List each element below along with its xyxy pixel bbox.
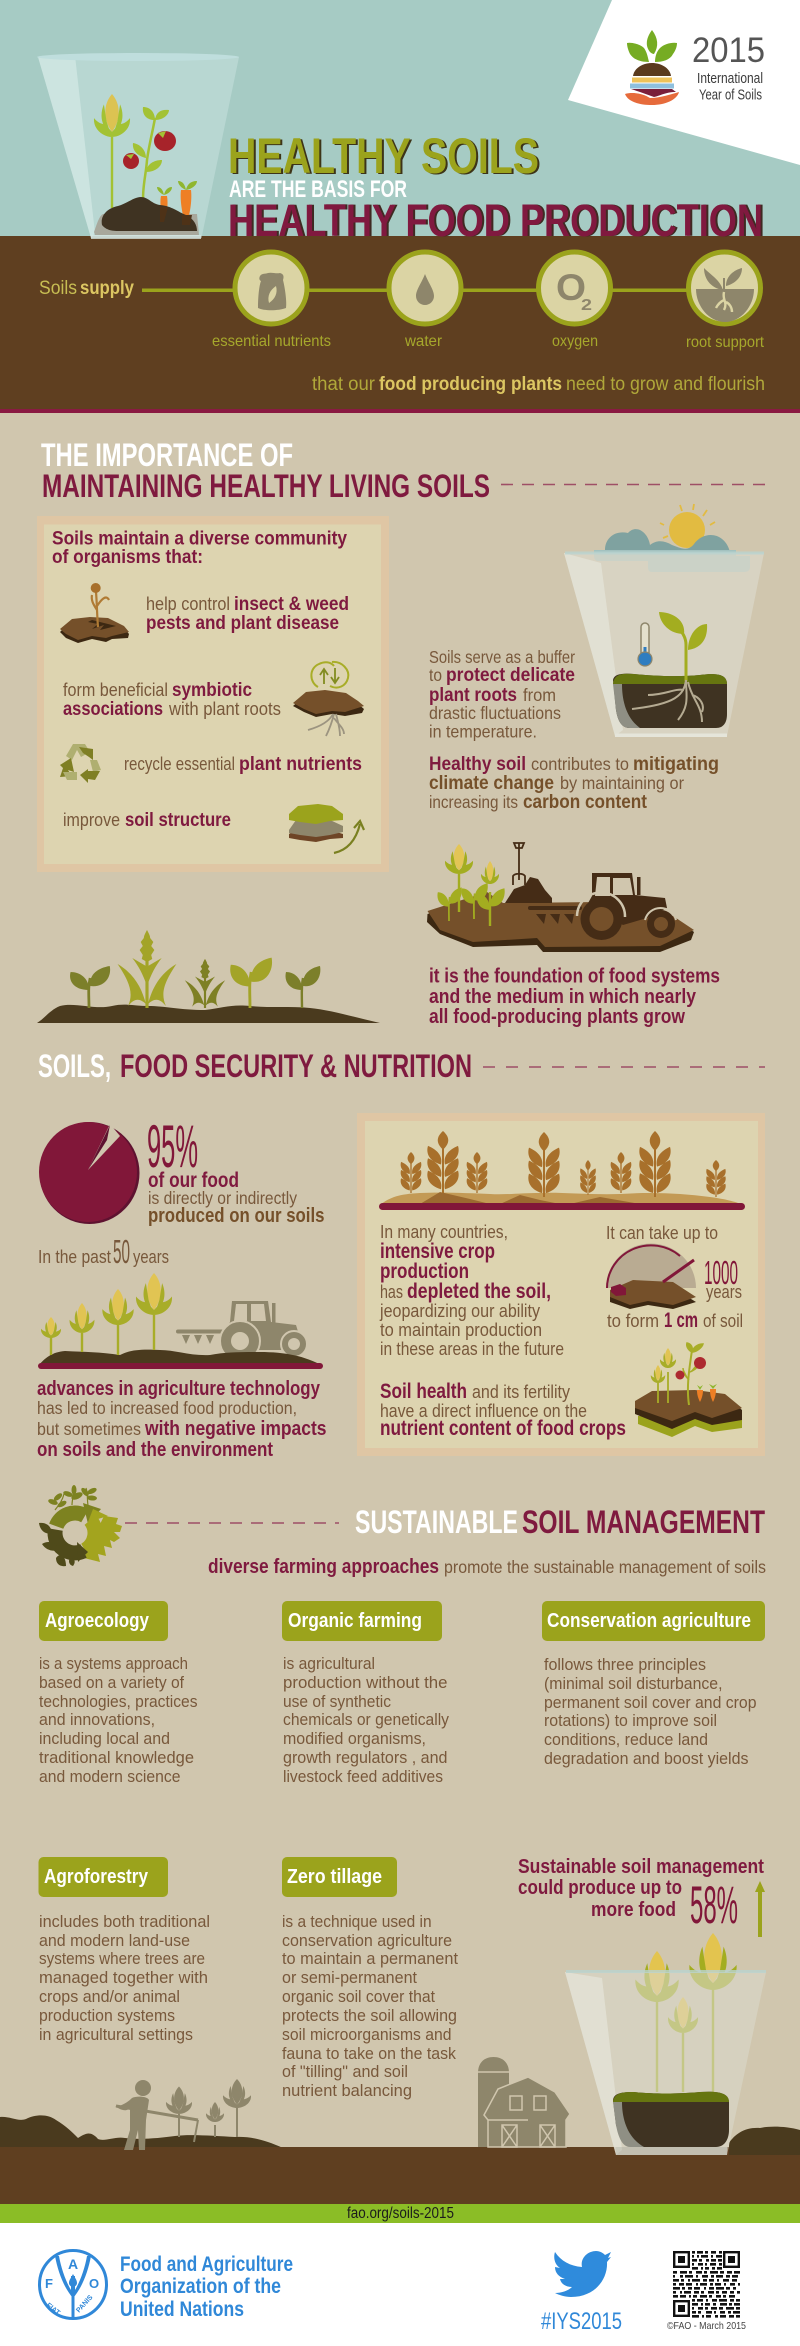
soil pile and spade <box>505 877 552 903</box>
illustration: wheat field <box>379 1131 745 1210</box>
right mound <box>729 2127 800 2155</box>
icon: FAO emblem: PANIS <box>75 2294 95 2314</box>
text: advances in agriculture technology: but sometimes <box>37 1419 141 1439</box>
card: Conservation agriculture <box>542 1601 765 1768</box>
card: Zero tillage <box>282 1857 458 2100</box>
description: modified organisms, <box>283 1729 426 1748</box>
stat: 95 percent of our food: 95% <box>147 1113 198 1180</box>
text: buffer against temperature: drastic fluctuations <box>429 703 561 723</box>
QR code <box>673 2252 740 2316</box>
heading: soils, food security and nutrition: SOILS, <box>38 1048 111 1084</box>
logo caption: International <box>697 71 763 87</box>
text: to form 1 cm of soil: to form <box>607 1311 659 1331</box>
text: buffer against temperature: from <box>523 685 556 705</box>
text: climate change mitigation: Healthy soil <box>429 753 526 775</box>
glass with sun, cloud, thermometer and plant <box>564 504 764 737</box>
item: symbiotic associations <box>63 679 281 720</box>
intro: diverse farming approaches: diverse farming approaches <box>208 1556 439 1578</box>
stat: 95 percent of our food <box>147 1113 324 1227</box>
text: buffer against temperature: to <box>429 665 442 685</box>
item: pest control: insect & weed <box>234 593 349 615</box>
item: soil structure: improve <box>63 810 120 830</box>
description: and modern science <box>39 1767 180 1786</box>
soil <box>613 2092 729 2147</box>
description: production without the <box>283 1673 448 1692</box>
description: crops and/or animal <box>39 1987 180 2006</box>
illustration: seedlings row <box>37 930 380 1023</box>
text: advances in agriculture technology: has led to increased food production, <box>37 1398 297 1418</box>
text: soil depletion: production <box>380 1260 469 1283</box>
text: soil depletion: in these areas in the future <box>380 1339 564 1359</box>
logo caption: Year of Soils <box>699 88 762 104</box>
card: Organic farming <box>282 1601 449 1786</box>
bottom soil band <box>0 2115 800 2204</box>
illustration: soil slab with crops, spade and tractor <box>427 843 694 952</box>
icon: oxygen <box>538 252 610 324</box>
text: soil depletion: jeopardizing our ability <box>379 1301 540 1321</box>
text: climate change mitigation: mitigating <box>633 753 719 775</box>
description: managed together with <box>39 1968 208 1987</box>
item: recycle nutrients: recycle essential <box>124 754 235 774</box>
text: climate change mitigation: contributes to <box>531 754 629 774</box>
icon captions: oxygen <box>552 333 598 350</box>
plant 4 <box>230 958 272 1008</box>
card: Agroforestry: Agroforestry <box>44 1866 149 1888</box>
card: Agroforestry <box>38 1857 210 2044</box>
item: symbiotic associations: with plant roots <box>168 699 281 719</box>
soil mound <box>37 1005 380 1023</box>
description <box>39 1654 198 1786</box>
top sprigs <box>47 1485 98 1510</box>
description: chemicals or genetically <box>283 1710 449 1729</box>
description: production systems <box>39 2006 175 2025</box>
description: protects the soil allowing <box>282 2006 457 2025</box>
closing sentence: that our <box>312 374 376 395</box>
illustration: nutrient-rich layered soil with crops <box>635 1343 742 1437</box>
closing sentence <box>312 374 765 395</box>
description: is agricultural <box>283 1654 375 1673</box>
stat: 95 percent of our food: produced on our soils <box>148 1205 324 1227</box>
icon: FAO emblem: F <box>45 2276 53 2291</box>
text: foundation of food systems: it is the foundation of food systems <box>429 966 720 988</box>
text: soil health: Soil health <box>380 1380 467 1403</box>
description: degradation and boost yields <box>544 1749 748 1768</box>
item: pest control: help control <box>146 594 230 614</box>
description: technologies, practices <box>39 1692 198 1711</box>
lead label: supply <box>80 278 134 299</box>
heading: importance of soils: MAINTAINING HEALTHY LIVING SOILS <box>42 468 490 504</box>
text: climate change mitigation <box>429 753 719 813</box>
heading: importance of soils: THE IMPORTANCE OF <box>41 437 293 473</box>
description: includes both traditional <box>39 1912 210 1931</box>
sky <box>0 0 800 236</box>
closing sentence: need to grow and flourish <box>566 374 765 395</box>
tomato plant <box>123 107 176 213</box>
plough <box>528 906 582 924</box>
description: based on a variety of <box>39 1673 184 1692</box>
thermometer <box>638 623 652 666</box>
item: recycle nutrients <box>124 753 362 775</box>
icon: FAO emblem: O <box>89 2276 99 2291</box>
icon: root support <box>688 252 760 324</box>
glass with tall corn plants <box>565 1933 766 2155</box>
icon: oxygen: 2 <box>581 297 592 314</box>
heading: soils, food security and nutrition: FOOD SECURITY & NUTRITION <box>120 1048 472 1084</box>
plant 5 <box>286 966 320 1008</box>
logo panel: International Year of Soils <box>568 0 800 165</box>
left mound <box>0 2115 283 2148</box>
maroon bar <box>38 1363 323 1369</box>
year: 2015 <box>692 31 765 70</box>
lead label: Soils <box>39 278 77 299</box>
heading: sustainable soil management: SUSTAINABLE <box>355 1504 518 1540</box>
stat: 1000 years: years <box>706 1282 742 1302</box>
card: Conservation agriculture: Conservation agriculture <box>547 1610 751 1632</box>
description: (minimal soil disturbance, <box>544 1674 722 1693</box>
text: advances in agriculture technology <box>37 1377 326 1461</box>
description: systems where trees are <box>39 1949 205 1968</box>
description: nutrient balancing <box>282 2081 412 2100</box>
intro: diverse farming approaches <box>208 1556 766 1578</box>
icon captions <box>212 333 764 351</box>
header banner <box>0 0 800 413</box>
text: advances in agriculture technology: advances in agriculture technology <box>37 1377 320 1400</box>
icon: water drop <box>389 252 461 324</box>
corn <box>179 2108 237 2137</box>
arrow <box>755 1881 765 1937</box>
lime arrow <box>84 1509 122 1562</box>
glass <box>564 553 764 736</box>
item: pest control: pests and plant disease <box>146 612 339 634</box>
soil <box>613 674 727 728</box>
text: buffer against temperature: plant roots <box>429 684 517 706</box>
soil band <box>0 236 800 410</box>
description: traditional knowledge <box>39 1748 194 1767</box>
text: it can take up to: It can take up to <box>606 1223 718 1243</box>
stat: 1000 years: 1000 <box>704 1254 738 1291</box>
stat: 95 percent of our food: is directly or indirectly <box>148 1188 297 1208</box>
text: buffer against temperature <box>429 647 575 742</box>
icon: oxygen: O <box>556 267 586 308</box>
text: foundation of food systems: and the medium in which nearly <box>429 986 697 1008</box>
soil <box>102 197 197 231</box>
icon: sustainable cycle with plants <box>39 1485 122 1566</box>
icon: cycle, soil and roots <box>293 662 364 736</box>
text: to form 1 cm of soil <box>607 1309 743 1332</box>
text: to form 1 cm of soil: 1 cm <box>664 1309 698 1332</box>
card: Agroecology <box>39 1601 198 1786</box>
text: advances in agriculture technology: on soils and the environment <box>37 1438 273 1461</box>
item: soil structure: soil structure <box>125 809 231 831</box>
title: HEALTHY SOILS <box>228 128 539 184</box>
description: or semi-permanent <box>282 1968 417 1987</box>
closing sentence: food producing plants <box>379 374 562 395</box>
description <box>283 1654 449 1786</box>
icon captions: water <box>404 333 443 350</box>
farmer <box>115 2080 198 2150</box>
text: in the past 50 years: 50 <box>113 1233 130 1270</box>
text: climate change mitigation: climate change <box>429 772 554 794</box>
description: and modern land-use <box>39 1931 190 1950</box>
text: soil depletion: In many countries, <box>380 1222 508 1242</box>
text: foundation of food systems: all food-producing plants grow <box>429 1006 685 1028</box>
maroon strip <box>0 409 800 413</box>
icon: essential nutrients sack <box>235 252 307 324</box>
description <box>544 1655 756 1768</box>
description: organic soil cover that <box>282 1987 435 2006</box>
callout: could produce up to 58% more food: 58% <box>690 1876 738 1935</box>
sun <box>660 504 715 548</box>
item: pest control <box>146 593 349 634</box>
description: in agricultural settings <box>39 2025 193 2044</box>
icon captions: root support <box>686 334 764 351</box>
description: soil microorganisms and <box>282 2025 452 2044</box>
icon: layered soil with arrow <box>289 804 364 853</box>
text: in the past 50 years: In the past <box>38 1247 111 1267</box>
dark arrow <box>39 1523 88 1566</box>
plant <box>674 624 686 681</box>
card: Zero tillage: Zero tillage <box>287 1866 382 1888</box>
icon: FAO emblem: FIAT <box>45 2302 61 2317</box>
roots <box>632 680 703 722</box>
text: buffer against temperature: in temperature. <box>429 722 537 742</box>
item: recycle nutrients: plant nutrients <box>239 753 362 775</box>
description: is a technique used in <box>282 1912 432 1931</box>
text: soil depletion: intensive crop <box>380 1240 495 1263</box>
description: growth regulators , and <box>283 1748 448 1767</box>
url bar <box>0 2204 800 2223</box>
icon: IYS logo <box>625 30 679 105</box>
plant 1 <box>70 966 110 1008</box>
text: foundation of food systems <box>429 966 720 1028</box>
copyright: ©FAO - March 2015 <box>667 2320 746 2332</box>
description: and innovations, <box>39 1710 155 1729</box>
description: rotations) to improve soil <box>544 1711 717 1730</box>
description <box>39 1912 210 2044</box>
carrots <box>157 181 197 225</box>
icon: cracked soil with plant <box>60 583 129 643</box>
text: climate change mitigation: by maintaining or <box>560 773 684 793</box>
description <box>282 1912 458 2100</box>
icon: FAO emblem: A <box>68 2256 78 2272</box>
chart: 95% pie <box>39 1122 140 1224</box>
text: advances in agriculture technology: with negative impacts <box>144 1417 326 1440</box>
callout: could produce up to 58% more food: more food <box>591 1898 676 1921</box>
soil <box>38 1350 323 1366</box>
url bar: fao.org/soils-2015 <box>347 2205 454 2222</box>
text: soil health: nutrient content of food crops <box>380 1417 626 1440</box>
panel: intensive crop production <box>357 1113 765 1456</box>
item: symbiotic associations: symbiotic <box>172 679 252 701</box>
gauge: 1000 years <box>606 1244 696 1309</box>
FAO name: Food and Agriculture <box>120 2252 293 2276</box>
corn <box>635 1933 737 2092</box>
description: use of synthetic <box>283 1692 391 1711</box>
clouds <box>605 529 730 552</box>
callout: could produce up to 58% more food: Sustainable soil management <box>518 1855 764 1878</box>
plant 2 tall millet <box>118 930 176 1008</box>
panel heading <box>52 528 347 568</box>
panel heading: Soils maintain a diverse community <box>52 528 347 550</box>
icon captions: essential nutrients <box>212 333 331 350</box>
heading: sustainable soil management <box>355 1504 765 1540</box>
grey base <box>94 214 199 235</box>
description: of "tilling" and soil <box>282 2062 408 2081</box>
card: Organic farming: Organic farming <box>288 1610 422 1632</box>
text: in the past 50 years: years <box>133 1247 169 1267</box>
text: climate change mitigation: carbon content <box>523 791 647 813</box>
stat: 95 percent of our food: of our food <box>148 1169 239 1192</box>
soils supply row <box>39 252 765 395</box>
tractor <box>176 1301 307 1361</box>
corn <box>94 94 130 208</box>
lead label <box>39 278 134 299</box>
illustration: growing corn with tractor <box>38 1273 323 1369</box>
description: permanent soil cover and crop <box>544 1693 756 1712</box>
item: symbiotic associations: form beneficial <box>63 680 168 700</box>
FAO name: United Nations <box>120 2297 244 2321</box>
panel: diverse community of organisms <box>37 516 389 872</box>
tractor <box>577 873 676 940</box>
text: in the past 50 years <box>38 1233 169 1270</box>
corn <box>41 1273 172 1355</box>
text: buffer against temperature: protect delicate <box>446 664 575 686</box>
text: soil health: and its fertility <box>472 1382 570 1402</box>
plant 3 small millet <box>185 959 225 1008</box>
text: to form 1 cm of soil: of soil <box>703 1311 743 1331</box>
corn <box>437 844 505 926</box>
heading: importance of soils <box>41 437 490 504</box>
illustration: farmer with corn <box>115 2079 251 2150</box>
item: soil structure <box>63 809 231 831</box>
heading: soils, food security and nutrition <box>38 1048 472 1084</box>
connector line <box>142 288 690 292</box>
panel heading: of organisms that: <box>52 546 203 568</box>
title: ARE THE BASIS FOR <box>229 176 407 203</box>
icon: recycle <box>60 744 101 783</box>
description: including local and <box>39 1729 170 1748</box>
card: Agroecology: Agroecology <box>45 1610 150 1632</box>
text: soil depletion: to maintain production <box>380 1320 542 1340</box>
item: symbiotic associations: associations <box>63 698 163 720</box>
icon: FAO emblem <box>40 2250 106 2318</box>
description: to maintain a permanent <box>282 1949 458 1968</box>
callout: could produce up to 58% more food: could produce up to <box>518 1876 682 1899</box>
text: climate change mitigation: increasing its <box>429 792 518 812</box>
illustration: barn and silo <box>478 2057 570 2147</box>
olive arrow <box>56 1503 101 1526</box>
glass with corn, tomato and carrot plants <box>37 53 239 239</box>
stat: 1000 years <box>704 1254 742 1302</box>
text: soil depletion: has <box>380 1282 403 1302</box>
description: conservation agriculture <box>282 1931 452 1950</box>
description: livestock feed additives <box>283 1767 443 1786</box>
title <box>228 128 763 246</box>
logo caption <box>697 71 763 104</box>
text: soil depletion: depleted the soil, <box>407 1280 551 1303</box>
description: fauna to take on the task <box>282 2044 456 2063</box>
FAO name: Organization of the <box>120 2274 281 2298</box>
text: soil health <box>380 1380 626 1440</box>
intro: diverse farming approaches: promote the sustainable management of soils <box>444 1557 766 1577</box>
text: buffer against temperature: Soils serve as a buffer <box>429 647 575 667</box>
description: follows three principles <box>544 1655 706 1674</box>
description: is a systems approach <box>39 1654 188 1673</box>
hashtag: #IYS2015 <box>541 2308 622 2335</box>
text: soil depletion <box>379 1222 564 1359</box>
text: soil health: have a direct influence on the <box>380 1401 587 1421</box>
footer <box>0 2223 800 2346</box>
FAO name <box>120 2252 293 2321</box>
icon: twitter bird <box>554 2251 611 2297</box>
description: conditions, reduce land <box>544 1730 708 1749</box>
callout: could produce up to 58% more food <box>518 1855 765 1937</box>
